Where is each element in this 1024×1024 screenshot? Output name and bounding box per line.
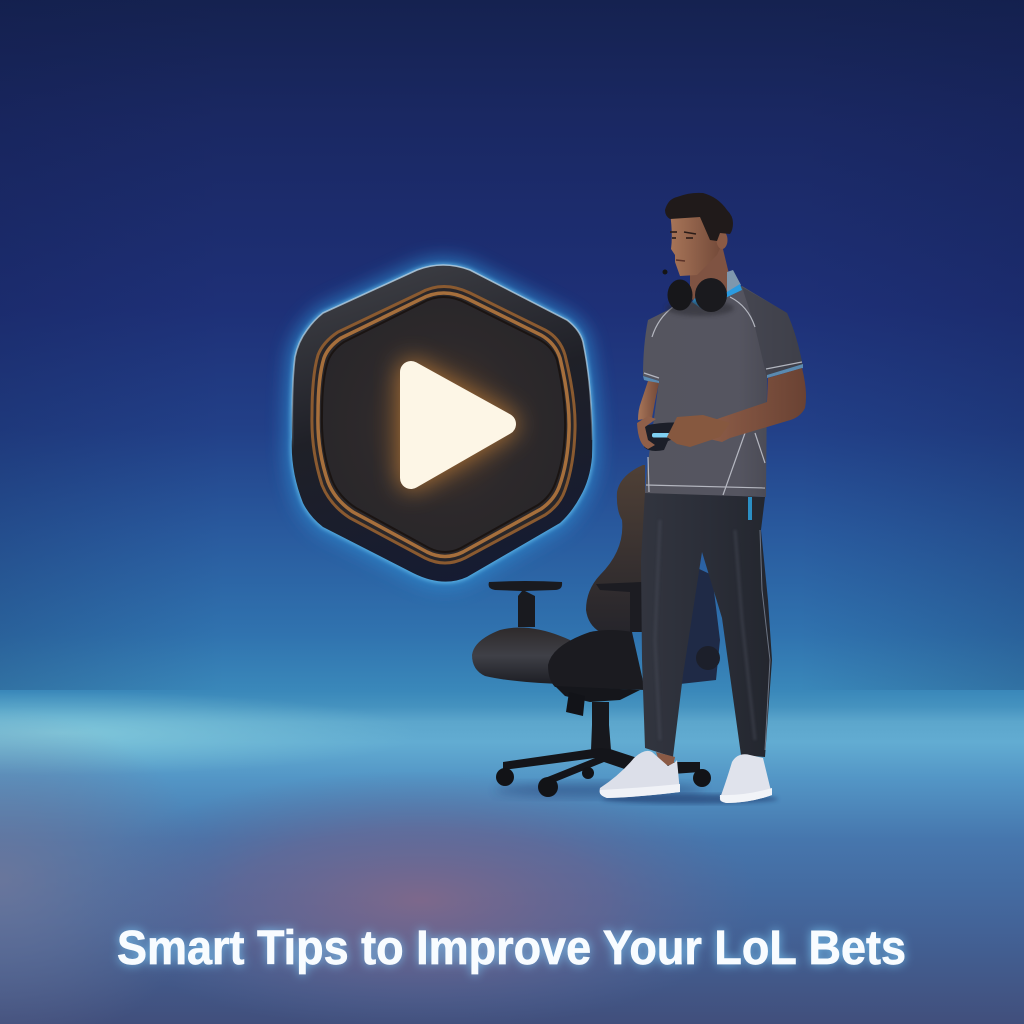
hair	[665, 193, 733, 241]
right hand	[667, 415, 730, 447]
right shoulder shading	[742, 287, 803, 378]
right shoe sole	[720, 788, 772, 803]
trouser side stripe	[760, 530, 770, 750]
badge copper ring	[312, 286, 575, 563]
play triangle glow	[411, 372, 505, 478]
right ear cup	[695, 278, 727, 312]
title glow: Smart Tips to Improve Your LoL Bets	[117, 922, 906, 975]
title text: Smart Tips to Improve Your LoL Bets	[117, 922, 906, 975]
badge inner shadow line	[322, 297, 565, 552]
play triangle	[411, 372, 505, 478]
chair wheels	[496, 767, 711, 797]
chair mechanism	[555, 686, 640, 702]
badge copper ring inner band	[318, 293, 569, 556]
mouth	[676, 260, 685, 261]
controller	[644, 422, 690, 451]
t-shirt	[643, 286, 803, 497]
left ear cup	[668, 280, 692, 310]
neck	[690, 245, 730, 310]
chair shadow on floor	[495, 783, 705, 797]
badge rim highlight	[292, 265, 592, 450]
right shoe	[720, 754, 772, 803]
left shoe	[600, 751, 680, 798]
face	[670, 210, 723, 276]
chair back right section	[680, 560, 720, 684]
blue collar trim	[692, 284, 742, 309]
icon: hexagonal play badge	[292, 265, 592, 582]
controller light bar	[652, 433, 670, 438]
trousers	[641, 492, 772, 757]
shirt piping	[644, 297, 802, 495]
badge wide blue halo	[292, 265, 592, 582]
headphones	[666, 278, 734, 316]
chair side panel	[548, 630, 645, 690]
chair left armrest	[489, 581, 562, 627]
chair right armrest	[596, 582, 642, 632]
left hand	[637, 416, 656, 449]
trouser pocket zip	[748, 497, 752, 520]
ear	[716, 231, 728, 249]
chair side cushion knob	[696, 646, 720, 670]
chair seat	[472, 628, 590, 684]
left sleeve cuff	[643, 376, 659, 384]
gaming chair	[472, 465, 720, 797]
left shoe sole	[600, 784, 680, 798]
headset mic	[662, 270, 668, 274]
right arm	[705, 368, 806, 442]
person with controller	[600, 193, 806, 804]
title	[117, 922, 906, 975]
eyebrows and eyes	[670, 232, 696, 238]
person floor shadow	[602, 794, 778, 804]
chair headrest and backrest	[586, 465, 645, 632]
controller body	[644, 422, 690, 451]
left arm	[638, 381, 659, 420]
badge outer rim	[292, 265, 592, 582]
chair gas cylinder	[591, 702, 611, 750]
left ankle	[656, 752, 675, 766]
collar	[727, 270, 741, 296]
trouser fold highlights	[655, 520, 755, 740]
headphone shadow	[666, 300, 734, 316]
right sleeve cuff	[767, 364, 803, 378]
badge tight blue glow	[292, 265, 592, 582]
chair lever	[566, 692, 585, 716]
chair base legs	[503, 748, 700, 786]
